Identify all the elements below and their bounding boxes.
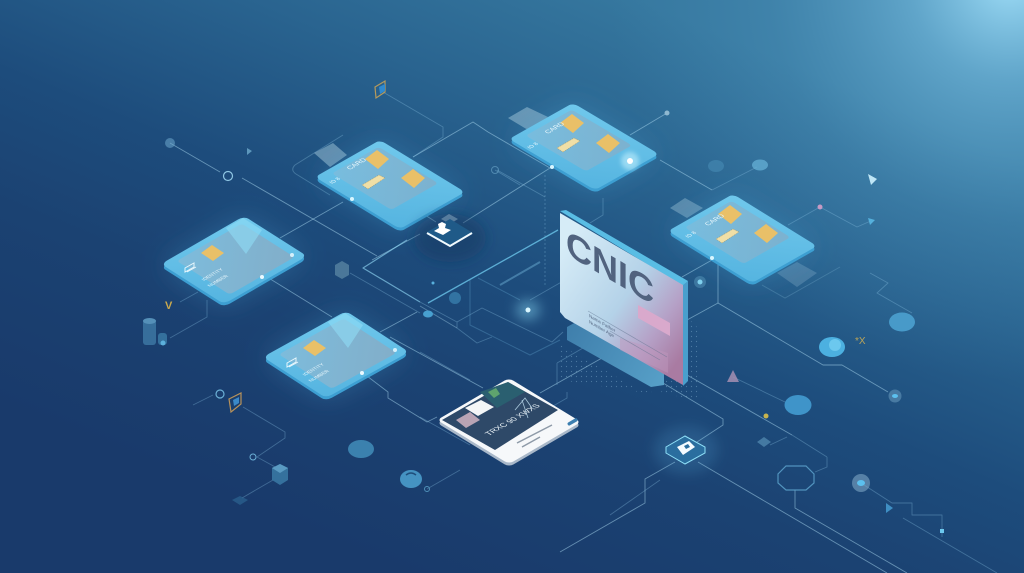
card: top chip card: ID 8: [527, 142, 540, 150]
card: right chip card: CARD: [704, 214, 727, 227]
card: bottom left: IDENTITY: [302, 362, 327, 377]
card: bottom left: NUMBER: [308, 369, 332, 383]
icon: stacked box: [272, 464, 288, 485]
phone screen card: TRXC 90 XWXS: [483, 402, 542, 437]
card: bottom left: [263, 311, 409, 401]
CNIC panel: Name Father: [589, 313, 616, 334]
card: top chip card: [509, 103, 659, 193]
CNIC panel: [560, 210, 688, 387]
icon: faint box: [232, 496, 248, 505]
card: upper left chip card: CARD: [346, 158, 369, 171]
circuit lines: [170, 92, 997, 573]
icon: hex node: [654, 426, 718, 474]
icon: orange document top: [375, 81, 385, 98]
CNIC panel: Number Age: [589, 319, 614, 340]
stand: [567, 322, 664, 387]
octagon node: [778, 466, 814, 490]
blob nodes: [165, 138, 915, 492]
card: upper left chip card: ID 8: [329, 177, 342, 185]
card: left: NUMBER: [207, 274, 231, 288]
small rings and markers: [165, 110, 944, 533]
card: left: [161, 216, 307, 307]
CNIC panel: CNIC: [566, 223, 654, 314]
card glows: [163, 105, 815, 398]
card: upper left chip card: [315, 140, 465, 232]
phone screen card: [437, 378, 581, 467]
icon: orange document bottom: [229, 393, 241, 412]
card: top chip card: CARD: [544, 122, 567, 135]
card: right chip card: ID 8: [685, 231, 698, 239]
icon: dark tile with user glyph: [414, 214, 486, 262]
small rings and markers: *X: [855, 336, 866, 347]
icon: database left: [143, 318, 167, 346]
card: left: IDENTITY: [201, 267, 226, 282]
card: right chip card: [668, 194, 817, 286]
dotted texture around CNIC stand: [560, 320, 700, 400]
ghost panels behind cards: [293, 107, 840, 298]
icon: small box mid left: [335, 261, 349, 279]
small rings and markers: V: [165, 300, 173, 312]
